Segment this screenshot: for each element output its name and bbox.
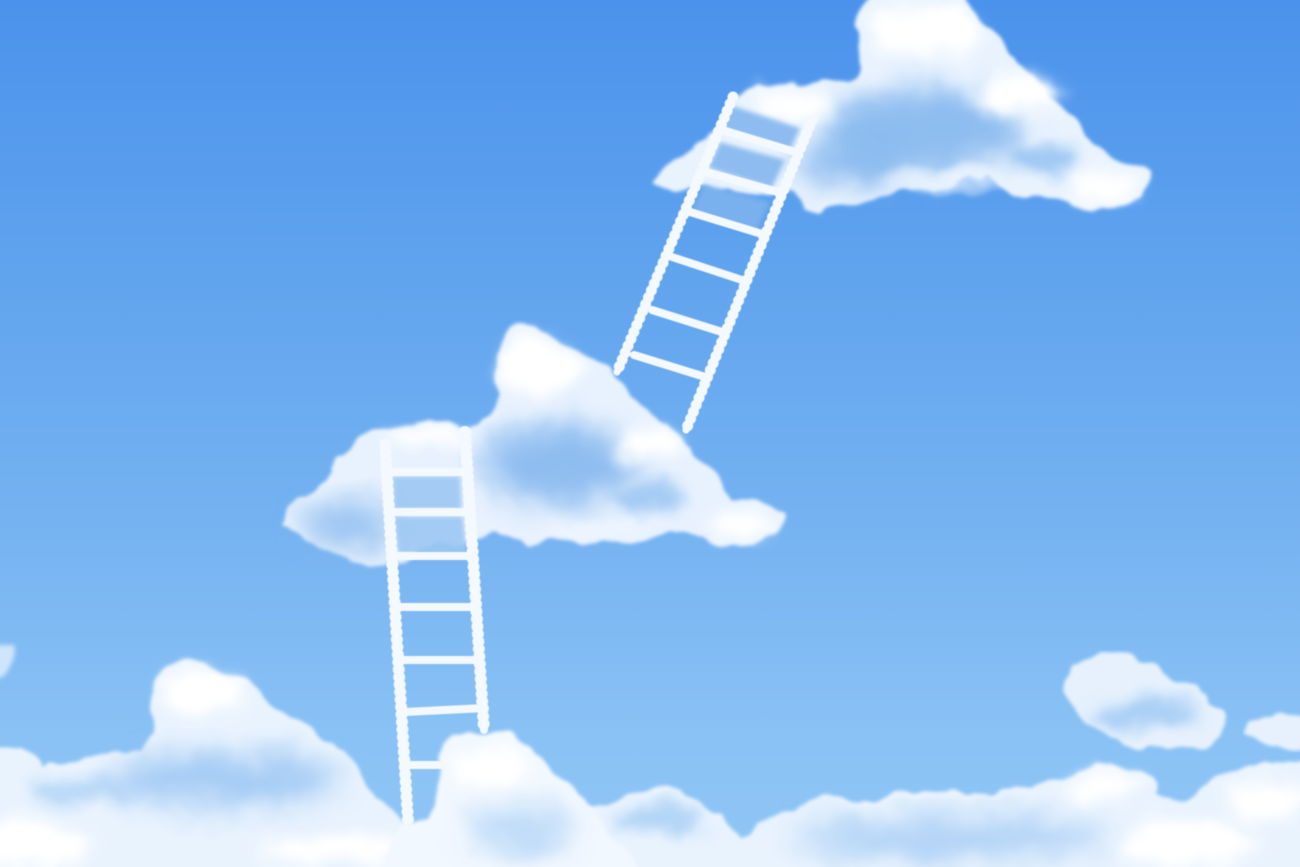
- bottom cloud bank: [0, 661, 1300, 867]
- small cloud far right: [1246, 710, 1300, 750]
- sky showing through the upper ladder over the cloud: [692, 105, 800, 232]
- middle cloud: [282, 331, 782, 562]
- upper ladder left rail: [617, 97, 733, 372]
- upper ladder right rail: [686, 120, 812, 430]
- small cloud right: [1060, 655, 1227, 752]
- upper ladder rungs: [634, 130, 795, 376]
- upper ladder: [617, 97, 812, 430]
- lower ladder: [385, 432, 485, 820]
- foreground cloud covering ladder foot: [380, 730, 650, 867]
- sky showing through the lower ladder over the cloud: [392, 476, 467, 554]
- small cloud far left: [0, 645, 15, 680]
- lower ladder rungs: [390, 472, 485, 765]
- upper cloud: [648, 0, 1150, 216]
- lower ladder left rail: [385, 445, 408, 820]
- lower ladder right rail: [465, 432, 484, 730]
